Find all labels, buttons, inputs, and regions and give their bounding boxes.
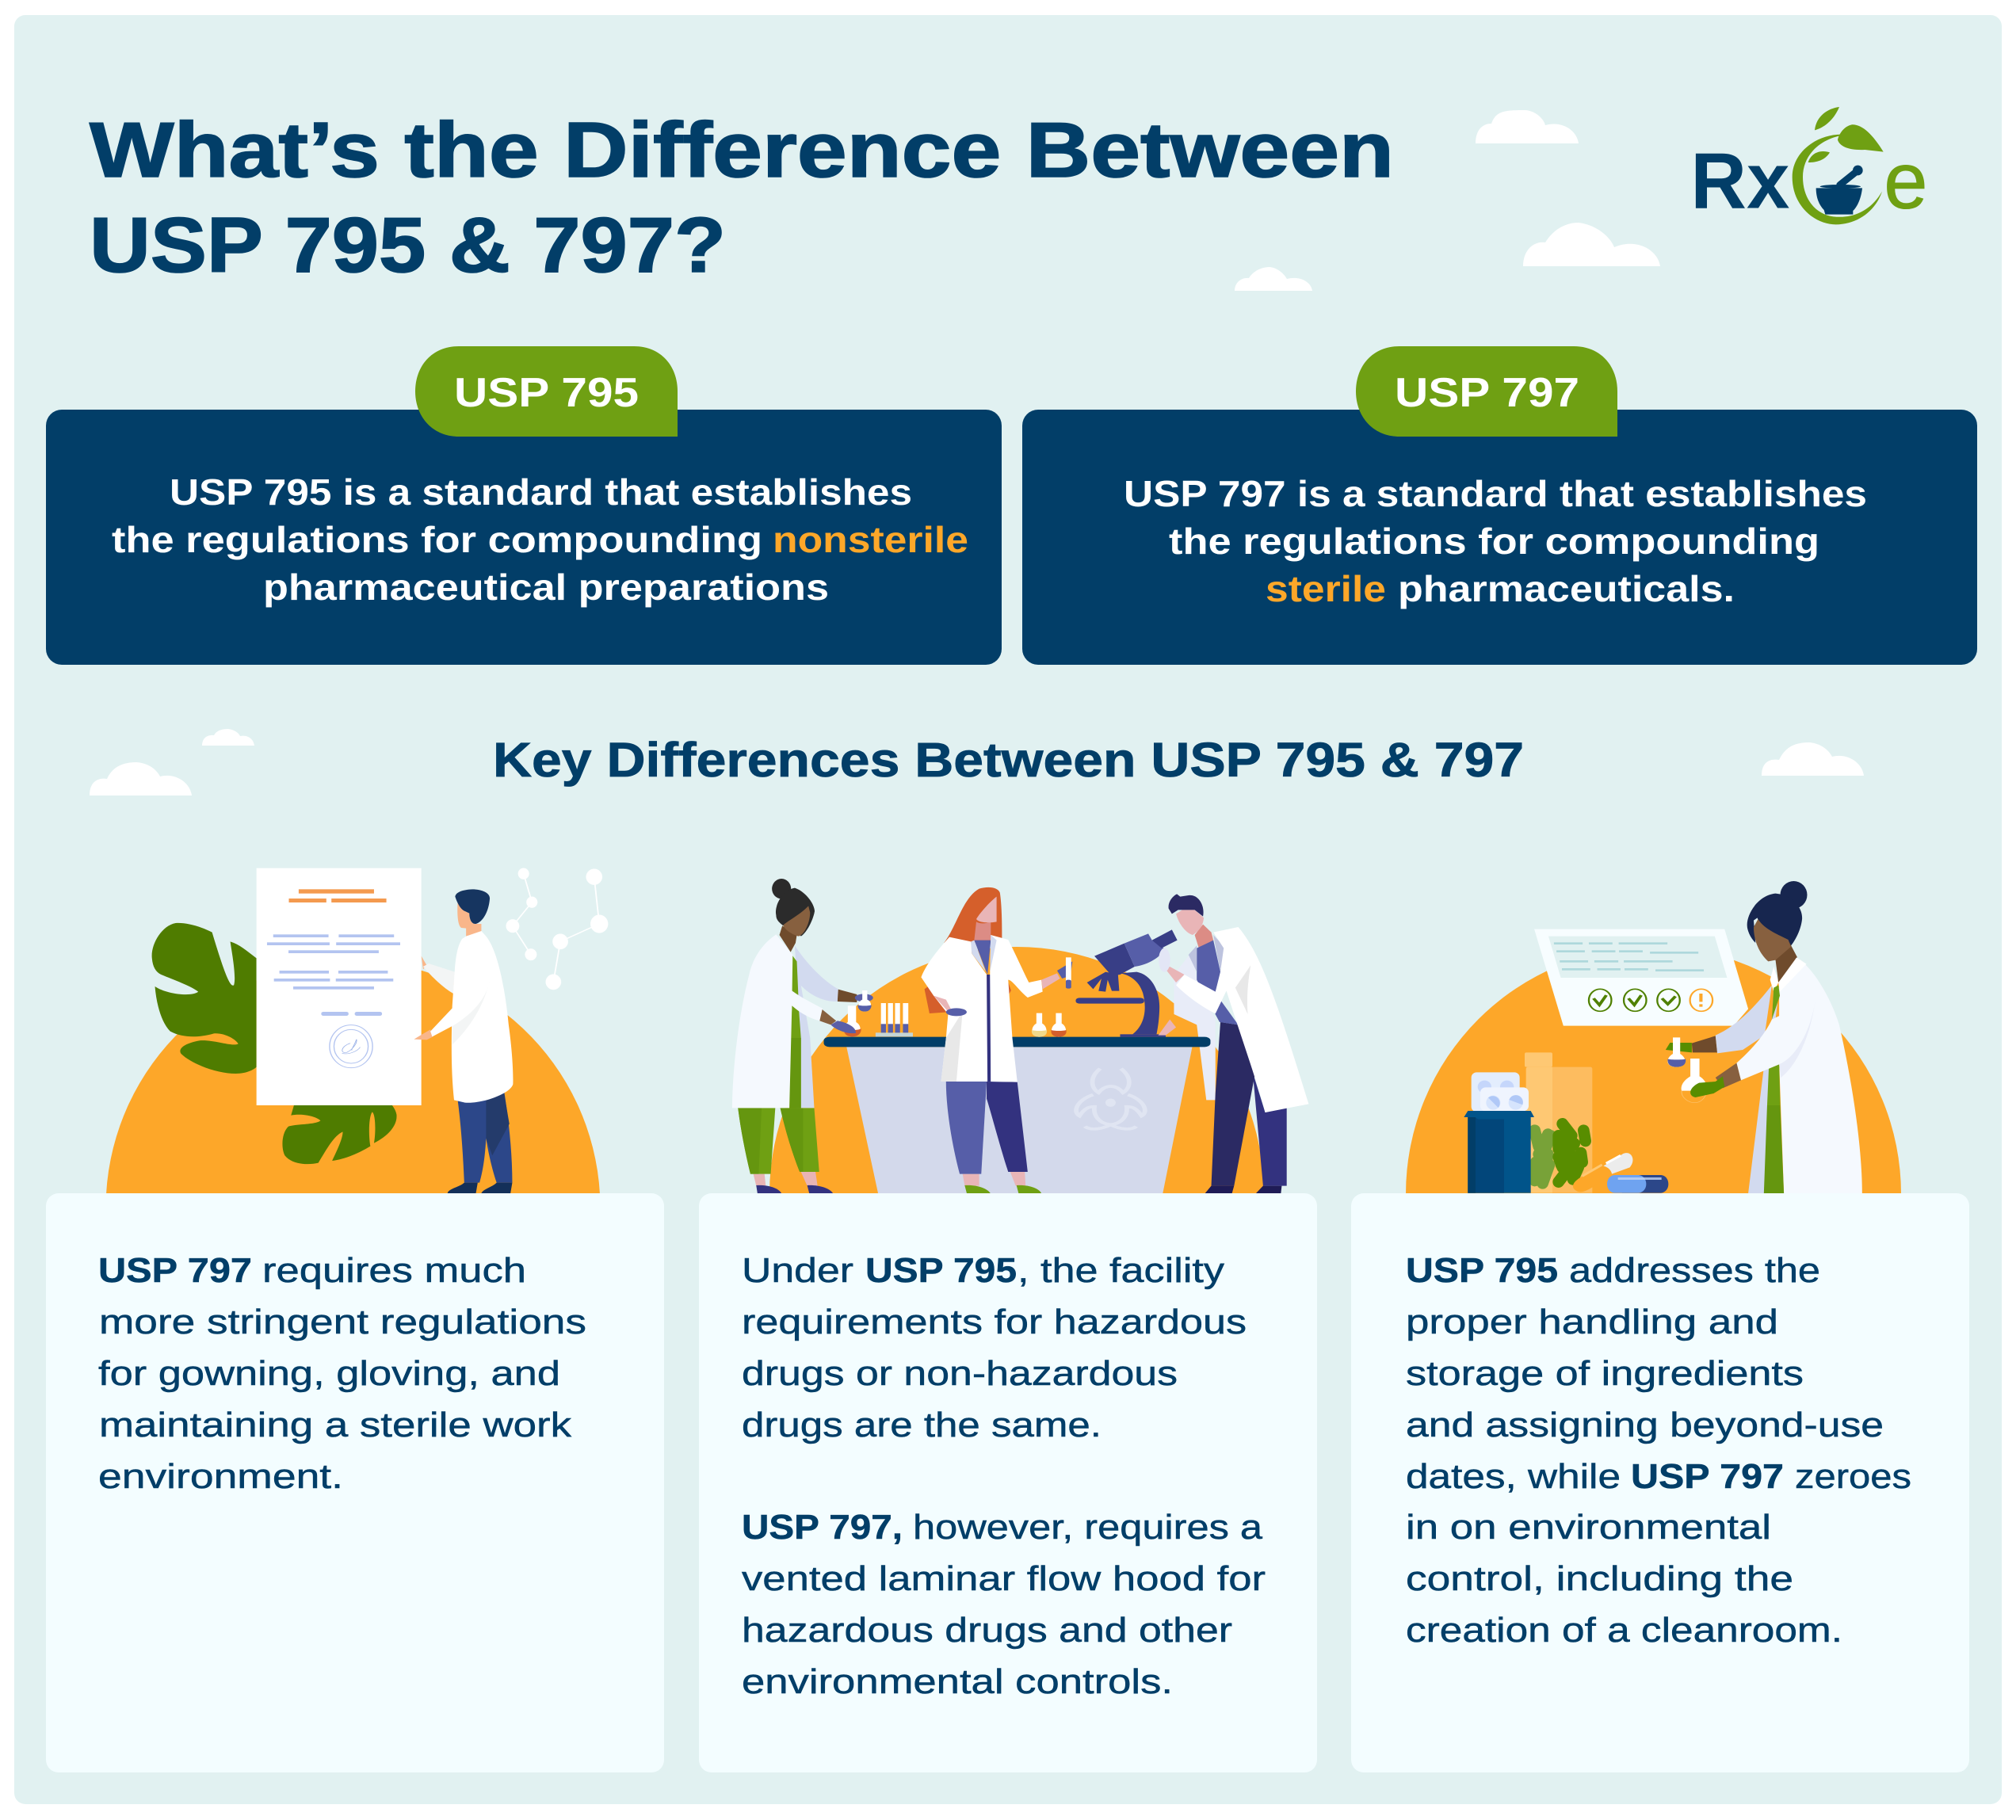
illustration: three scientists at biohazard table xyxy=(732,879,1308,1194)
text: USP 795 description xyxy=(112,471,968,608)
flasks on table xyxy=(1032,1013,1067,1037)
text: USP 797 description: USP 797 is a standard that establishes xyxy=(1124,473,1867,514)
card 2: USP 795 facility xyxy=(699,1193,1317,1772)
clouds: middle xyxy=(90,729,1864,796)
icon: molecule xyxy=(506,868,608,990)
text: USP 795 description: the regulations for compounding xyxy=(112,519,762,560)
card 3 text: storage of ingredients xyxy=(1406,1354,1804,1393)
orange semicircle xyxy=(106,961,600,1194)
illustration: scientist with certificate xyxy=(106,868,608,1194)
heading: key differences: Key Differences Between USP 795 & 797 xyxy=(493,733,1524,787)
card 3 text: and assigning beyond-use xyxy=(1406,1406,1884,1444)
figure: scientist xyxy=(1666,881,1862,1193)
card 2 text: , the facility xyxy=(1018,1251,1224,1290)
card 3 text xyxy=(1406,1251,1911,1650)
orange semicircle xyxy=(769,947,1264,1194)
icon: biohazard xyxy=(1076,1069,1145,1129)
card 1 text: for gowning, gloving, and xyxy=(98,1354,560,1393)
illustration: scientist with medicine checklist xyxy=(1406,881,1901,1194)
text: USP 797 description xyxy=(1124,473,1867,609)
card 3 text: USP 795 xyxy=(1406,1251,1558,1290)
card 3 text: creation of a cleanroom. xyxy=(1406,1611,1842,1650)
card 2 text: requirements for hazardous xyxy=(742,1303,1247,1341)
text: USP 797 description: sterile xyxy=(1266,568,1386,609)
orange semicircle xyxy=(1406,947,1901,1194)
card 2 text: USP 797, xyxy=(742,1508,903,1547)
badge: USP 795 xyxy=(415,346,678,437)
card 2 text: environmental controls. xyxy=(742,1662,1173,1701)
card 1 text xyxy=(98,1251,586,1496)
text: USP 797 description: the regulations for compounding xyxy=(1169,521,1819,562)
card 2 text: drugs are the same. xyxy=(742,1406,1102,1444)
figure: right scientist xyxy=(1159,894,1308,1193)
icon: green leaf bottom xyxy=(282,1105,397,1164)
title xyxy=(90,106,1394,288)
text: USP 795 description: USP 795 is a standard that establishes xyxy=(170,471,912,513)
panel: USP 795 definition xyxy=(46,346,1002,665)
card 1 text: more stringent regulations xyxy=(99,1303,586,1341)
medicine: jar, blisters, box, capsules xyxy=(1464,1052,1668,1193)
card 2 text: USP 795 xyxy=(865,1251,1017,1290)
icon: microscope xyxy=(1075,929,1178,1037)
title: What’s the Difference Between xyxy=(90,106,1394,193)
card 3 text: in on environmental xyxy=(1406,1508,1771,1547)
card 3 text: proper handling and xyxy=(1406,1303,1778,1341)
card 2 text: drugs or non-hazardous xyxy=(742,1354,1178,1393)
card 1 text: maintaining a sterile work xyxy=(99,1406,572,1444)
card 1: USP 797 gowning xyxy=(46,1193,664,1772)
text: USP 797 description: pharmaceuticals. xyxy=(1398,568,1735,609)
card 3 text: control, including the xyxy=(1406,1559,1793,1598)
card 2 text: however, requires a xyxy=(913,1508,1263,1547)
clouds: top right xyxy=(1235,110,1660,291)
card 3 text: USP 797 xyxy=(1631,1457,1784,1496)
card 2 text: Under xyxy=(742,1251,853,1290)
card 1 text: USP 797 xyxy=(98,1251,252,1290)
figure: scientist xyxy=(414,889,513,1193)
title: USP 795 & 797? xyxy=(90,201,726,288)
panel background xyxy=(1022,410,1977,665)
card 1 text: requires much xyxy=(262,1251,526,1290)
badge: USP 797: USP 797 xyxy=(1395,370,1579,416)
table xyxy=(824,1037,1210,1193)
card 3: USP 795 handling xyxy=(1351,1193,1969,1772)
document xyxy=(257,868,422,1105)
text: USP 795 description: pharmaceutical preparations xyxy=(263,567,829,608)
panel: USP 797 definition xyxy=(1022,346,1977,665)
logo: RxCe xyxy=(1690,107,1927,226)
logo: RxCe: e xyxy=(1884,137,1927,226)
checklist board xyxy=(1534,929,1748,1026)
card 3 text: addresses the xyxy=(1569,1251,1820,1290)
card 2 text: hazardous drugs and other xyxy=(742,1611,1232,1650)
icon: green leaf top xyxy=(152,923,257,1074)
figure: left scientist xyxy=(732,879,873,1193)
card 1 text: environment. xyxy=(98,1457,343,1496)
badge: USP 797 xyxy=(1356,346,1617,437)
badge: USP 795: USP 795 xyxy=(454,370,639,416)
test tubes xyxy=(876,1003,913,1036)
back of right scientist coat xyxy=(1174,951,1216,1100)
card 3 text: zeroes xyxy=(1795,1457,1911,1496)
card 2 text xyxy=(742,1251,1266,1701)
card 2 text: vented laminar flow hood for xyxy=(742,1559,1266,1598)
panel background xyxy=(46,410,1002,665)
text: USP 795 description: nonsterile xyxy=(773,519,968,560)
card 3 text: dates, while xyxy=(1406,1457,1621,1496)
logo: RxCe: Rx xyxy=(1690,137,1789,226)
figure: centre scientist xyxy=(921,887,1072,1193)
